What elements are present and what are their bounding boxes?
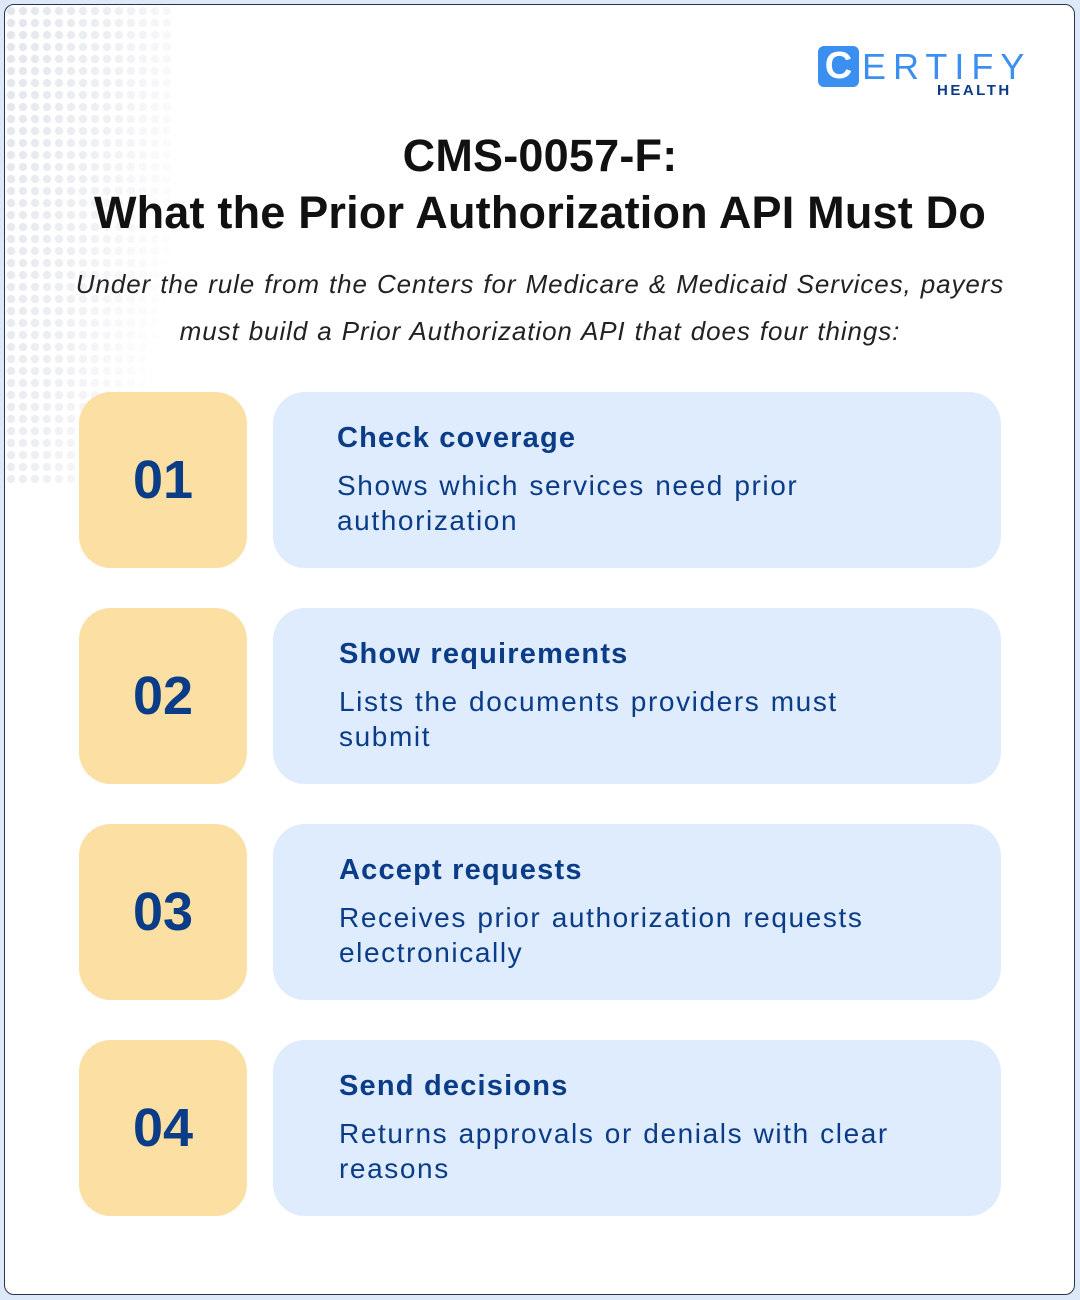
panel: check coverage [273, 392, 1001, 568]
step 04 [79, 1040, 1001, 1216]
number 03: 03 [133, 882, 193, 942]
number 02: 02 [133, 666, 193, 726]
panel: show requirements: submit [339, 721, 431, 752]
step 03 [79, 824, 1001, 1000]
panel: check coverage: Check coverage [337, 422, 576, 454]
panel: accept requests: electronically [339, 937, 523, 968]
panel: check coverage: authorization [337, 505, 518, 536]
panel: show requirements: Show requirements [339, 638, 629, 670]
panel: send decisions: reasons [339, 1153, 450, 1184]
icon: C square [818, 46, 859, 87]
logo: HEALTH [937, 82, 1012, 99]
panel: send decisions: Send decisions [339, 1070, 569, 1102]
panel: check coverage: Shows which services need prior [337, 470, 798, 501]
panel: accept requests: Receives prior authorization requests [339, 902, 863, 933]
step 02 [79, 608, 1001, 784]
logo [818, 45, 1031, 99]
panel: accept requests [273, 824, 1001, 1000]
panel: send decisions [273, 1040, 1001, 1216]
subtitle: must build a Prior Authorization API that does four things: [180, 316, 900, 346]
subtitle: Under the rule from the Centers for Medicare & Medicaid Services, payers [76, 269, 1004, 299]
title: What the Prior Authorization API Must Do [94, 187, 986, 238]
logo text: ERTIFY [862, 46, 1031, 87]
panel: send decisions: Returns approvals or denials with clear [339, 1118, 889, 1149]
number 02 [79, 608, 247, 784]
number 04 [79, 1040, 247, 1216]
step 01 [79, 392, 1001, 568]
subtitle [76, 269, 1004, 346]
number 01: 01 [133, 450, 193, 510]
number 04: 04 [133, 1098, 193, 1158]
panel: show requirements [273, 608, 1001, 784]
panel: accept requests: Accept requests [339, 854, 583, 886]
number 01 [79, 392, 247, 568]
number 03 [79, 824, 247, 1000]
title: CMS-0057-F: [403, 130, 677, 181]
icon: C square: C [825, 45, 852, 87]
panel: show requirements: Lists the documents providers must [339, 686, 838, 717]
title [94, 130, 986, 238]
